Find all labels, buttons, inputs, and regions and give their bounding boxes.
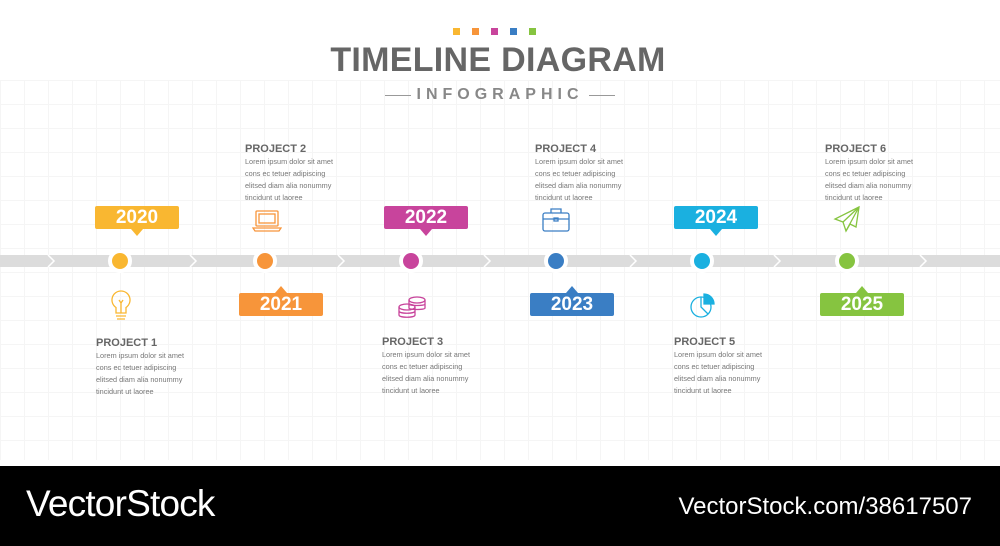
project 4 bbox=[535, 143, 623, 202]
icon: paper plane bbox=[834, 206, 860, 232]
year 2023 bbox=[530, 293, 614, 316]
project 5: elitsed diam alia nonummy bbox=[674, 374, 760, 383]
icon: bulb bbox=[111, 290, 131, 320]
project 3: Lorem ipsum dolor sit amet bbox=[382, 350, 470, 359]
year 2022: 2022 bbox=[405, 207, 447, 228]
project 4: PROJECT 4 bbox=[535, 143, 596, 155]
project 5: PROJECT 5 bbox=[674, 336, 735, 348]
text: tincidunt ut laoree bbox=[535, 193, 593, 202]
project 3 bbox=[382, 336, 470, 395]
project 6: PROJECT 6 bbox=[825, 143, 886, 155]
text: tincidunt ut laoree bbox=[674, 386, 732, 395]
footer bar: VectorStock.com/38617507 bbox=[678, 493, 972, 520]
year 2025: 2025 bbox=[841, 294, 883, 315]
text: tincidunt ut laoree bbox=[825, 193, 883, 202]
project 5: cons ec tetuer adipiscing bbox=[674, 362, 754, 371]
year 2023: 2023 bbox=[551, 294, 593, 315]
project 6: elitsed diam alia nonummy bbox=[825, 181, 911, 190]
project 2: elitsed diam alia nonummy bbox=[245, 181, 331, 190]
icon: briefcase bbox=[542, 208, 570, 232]
text: tincidunt ut laoree bbox=[382, 386, 440, 395]
text: tincidunt ut laoree bbox=[96, 387, 154, 396]
year 2024: 2024 bbox=[695, 207, 737, 228]
project 2: cons ec tetuer adipiscing bbox=[245, 169, 325, 178]
title: TIMELINE DIAGRAM bbox=[330, 41, 666, 79]
project 5 bbox=[674, 336, 762, 395]
timeline bar bbox=[0, 250, 1000, 273]
project 2 bbox=[245, 143, 333, 202]
footer bar: VectorStock bbox=[26, 483, 215, 524]
year 2021: 2021 bbox=[260, 294, 302, 315]
icon: coins bbox=[398, 296, 426, 318]
icon: laptop bbox=[252, 210, 282, 232]
year 2022 bbox=[384, 206, 468, 229]
project 1 bbox=[96, 337, 184, 396]
project 6 bbox=[825, 143, 913, 202]
project 1: Lorem ipsum dolor sit amet bbox=[96, 351, 184, 360]
project 2: PROJECT 2 bbox=[245, 143, 306, 155]
project 3: cons ec tetuer adipiscing bbox=[382, 362, 462, 371]
year 2024 bbox=[674, 206, 758, 229]
project 4: cons ec tetuer adipiscing bbox=[535, 169, 615, 178]
icon: pie chart bbox=[690, 293, 715, 318]
color squares bbox=[453, 28, 536, 35]
project 4: Lorem ipsum dolor sit amet bbox=[535, 157, 623, 166]
project 1: elitsed diam alia nonummy bbox=[96, 375, 182, 384]
subtitle: INFOGRAPHIC bbox=[416, 86, 584, 103]
project 1: PROJECT 1 bbox=[96, 337, 157, 349]
footer bar bbox=[0, 466, 1000, 546]
year 2025 bbox=[820, 293, 904, 316]
year 2020 bbox=[95, 206, 179, 229]
project 6: Lorem ipsum dolor sit amet bbox=[825, 157, 913, 166]
project 3: PROJECT 3 bbox=[382, 336, 443, 348]
project 5: Lorem ipsum dolor sit amet bbox=[674, 350, 762, 359]
year 2020: 2020 bbox=[116, 207, 158, 228]
project 1: cons ec tetuer adipiscing bbox=[96, 363, 176, 372]
project 3: elitsed diam alia nonummy bbox=[382, 374, 468, 383]
text: tincidunt ut laoree bbox=[245, 193, 303, 202]
project 6: cons ec tetuer adipiscing bbox=[825, 169, 905, 178]
project 2: Lorem ipsum dolor sit amet bbox=[245, 157, 333, 166]
project 4: elitsed diam alia nonummy bbox=[535, 181, 621, 190]
year 2021 bbox=[239, 293, 323, 316]
